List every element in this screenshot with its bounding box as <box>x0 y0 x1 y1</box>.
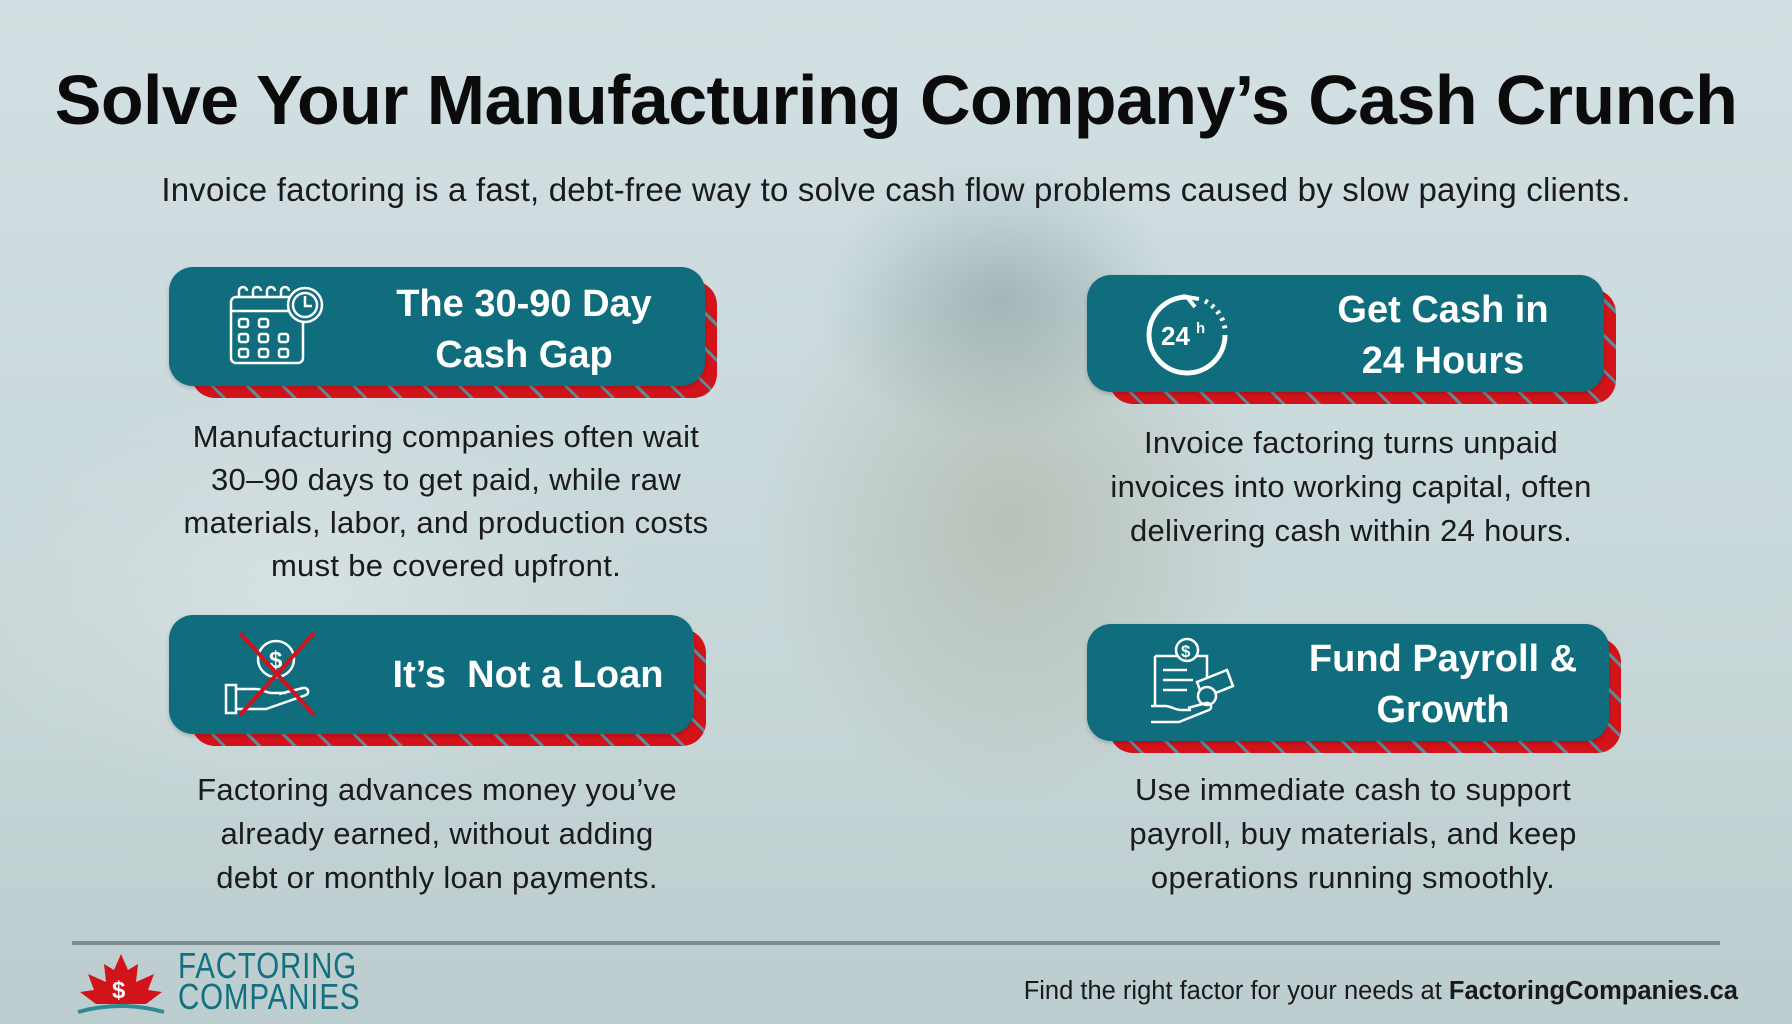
heading: It’s Not a Loan <box>393 654 663 696</box>
icon: calendar with clock <box>230 286 324 364</box>
title: Solve Your Manufacturing Company’s Cash Crunch <box>55 61 1737 139</box>
icon: invoice with money <box>1151 638 1235 724</box>
icon: hand with crossed coin <box>224 632 316 716</box>
logo text: FACTORING <box>178 945 357 986</box>
panel: get cash in 24 hours <box>1086 275 1616 404</box>
text: get cash: invoices into working capital, often <box>1110 469 1592 504</box>
heading: The 30-90 Day <box>396 283 652 325</box>
heading <box>1309 638 1577 731</box>
heading: Growth <box>1376 689 1509 731</box>
icon: 24h clock <box>1146 294 1228 376</box>
logo <box>78 945 360 1017</box>
heading: Cash Gap <box>435 334 613 376</box>
text: cash gap <box>184 419 708 583</box>
text: cash gap: Manufacturing companies often wait <box>193 419 699 454</box>
footer divider <box>72 941 1720 945</box>
subtitle: Invoice factoring is a fast, debt-free way to solve cash flow problems caused by slow paying clients. <box>161 171 1631 208</box>
heading <box>396 283 652 376</box>
logo text <box>178 945 360 1017</box>
text: get cash <box>1110 425 1592 548</box>
text: not a loan: already earned, without adding <box>221 816 653 851</box>
text: fund payroll: Use immediate cash to support <box>1135 772 1571 807</box>
panel: 30-90 day cash gap <box>167 267 717 398</box>
text: cash gap: materials, labor, and production costs <box>184 505 708 540</box>
heading: Get Cash in <box>1337 289 1549 331</box>
text: not a loan <box>197 772 677 895</box>
icon: hand with crossed coin: $ <box>269 647 283 674</box>
icon: 24h clock: h <box>1196 320 1205 337</box>
icon: maple leaf: $ <box>112 977 126 1004</box>
text: cash gap: must be covered upfront. <box>271 548 621 583</box>
panel: not a loan <box>167 615 706 746</box>
text: get cash: Invoice factoring turns unpaid <box>1144 425 1558 460</box>
text: get cash: delivering cash within 24 hours. <box>1130 513 1572 548</box>
text: not a loan: Factoring advances money you’ve <box>197 772 677 807</box>
text: not a loan: debt or monthly loan payments. <box>216 860 658 895</box>
icon: maple leaf <box>78 954 164 1014</box>
heading: Fund Payroll & <box>1309 638 1577 680</box>
text: fund payroll: operations running smoothly. <box>1151 860 1555 895</box>
icon: 24h clock: 24 <box>1161 321 1190 351</box>
panel: fund payroll <box>1085 624 1621 753</box>
text: cash gap: 30–90 days to get paid, while raw <box>211 462 681 497</box>
footer text: Find the right factor for your needs at FactoringCompanies.ca <box>1024 977 1738 1005</box>
logo text: COMPANIES <box>178 976 360 1017</box>
heading <box>1337 289 1549 382</box>
heading: 24 Hours <box>1362 340 1524 382</box>
text: fund payroll: payroll, buy materials, and keep <box>1129 816 1577 851</box>
icon: invoice with money: $ <box>1181 642 1191 661</box>
text: fund payroll <box>1129 772 1577 895</box>
